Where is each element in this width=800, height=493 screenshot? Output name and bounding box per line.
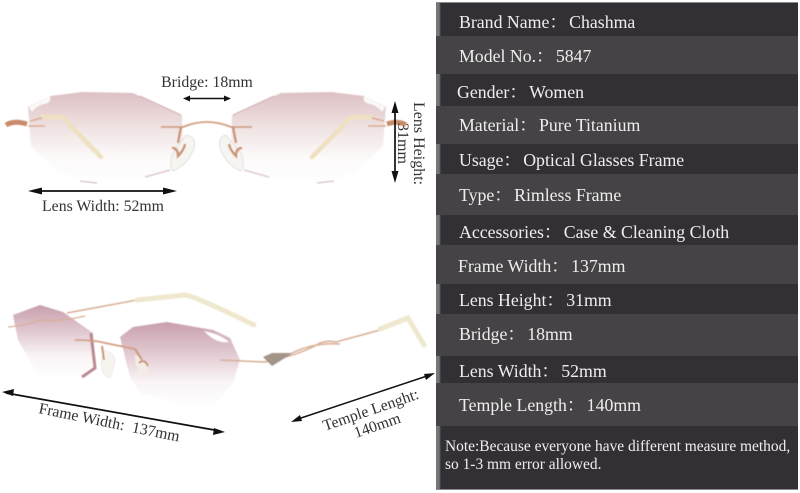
far lens — [13, 305, 95, 378]
lens height label: Lens Height: — [410, 102, 427, 185]
panel: specifications — [436, 2, 798, 490]
side view glasses — [8, 295, 424, 407]
temple arrow — [291, 373, 435, 422]
left lens cutout — [29, 96, 50, 112]
far temple tip — [137, 295, 254, 325]
left hinge — [6, 118, 45, 126]
row: gender — [436, 74, 798, 106]
lens width label: Lens Width: 52mm — [42, 198, 165, 215]
row: temple length — [436, 383, 798, 426]
frame width arrow — [2, 389, 225, 435]
right lens — [231, 92, 386, 184]
row: brand name: Brand Name：Chashma — [459, 12, 635, 32]
near nose pad — [135, 355, 148, 377]
row: brand name — [436, 3, 798, 36]
row: type — [436, 174, 798, 215]
right temple — [312, 117, 372, 157]
near lens cutout — [204, 331, 229, 342]
row: lens height: Lens Height：31mm — [459, 290, 612, 310]
row: type: Type：Rimless Frame — [459, 184, 621, 204]
row: usage: Usage：Optical Glasses Frame — [459, 150, 684, 170]
lens width arrow — [28, 188, 177, 194]
row: model number — [436, 36, 798, 74]
lens height value: 31mm — [394, 123, 411, 164]
right nose arm — [229, 127, 242, 156]
far lens edge — [82, 333, 95, 377]
far hinge wire — [8, 316, 85, 327]
row: material — [436, 106, 798, 144]
right hinge — [368, 118, 406, 126]
measurement illustrations — [2, 74, 435, 446]
row: lens height — [436, 284, 798, 314]
row: usage — [436, 144, 798, 174]
row: material: Material：Pure Titanium — [459, 115, 640, 135]
front view glasses — [6, 92, 406, 184]
row: lens width — [436, 356, 798, 383]
left nose pad — [171, 135, 195, 171]
right nose pad — [220, 135, 243, 171]
near temple tip — [380, 318, 424, 345]
row: bridge — [436, 314, 798, 356]
row: frame width — [436, 245, 798, 284]
note: Note:Because everyone have different measure method, so 1-3 mm error allowed. — [445, 438, 790, 473]
row: gender: Gender：Women — [457, 82, 584, 102]
row: accessories: Accessories：Case & Cleaning Cloth — [459, 222, 729, 242]
row: frame width: Frame Width：137mm — [458, 256, 625, 276]
frame width label: Frame Width: 137mm — [37, 400, 182, 446]
lens height arrow — [392, 101, 398, 183]
left lens — [28, 92, 183, 184]
bridge label: Bridge: 18mm — [161, 74, 254, 91]
lens rim tints — [80, 96, 334, 183]
near nose arm — [102, 346, 148, 366]
left temple — [42, 117, 101, 157]
row: accessories — [436, 215, 798, 245]
row: model number: Model No.：5847 — [459, 46, 591, 66]
bridge arrow — [183, 96, 231, 102]
right lens cutout — [364, 96, 385, 112]
row: bridge: Bridge：18mm — [459, 324, 573, 344]
nose pads — [101, 350, 115, 378]
note — [436, 426, 798, 489]
near lens — [120, 322, 240, 407]
bridge — [161, 122, 252, 127]
temple label: Temple Lenght: — [321, 386, 421, 435]
row: temple length: Temple Length：140mm — [459, 394, 641, 414]
temple value: 140mm — [352, 410, 404, 442]
bridge — [75, 340, 135, 349]
near temple — [220, 330, 380, 362]
far temple — [67, 300, 137, 313]
left nose arm — [172, 127, 185, 156]
temple jewel — [263, 353, 293, 366]
row: lens width: Lens Width：52mm — [459, 360, 607, 380]
